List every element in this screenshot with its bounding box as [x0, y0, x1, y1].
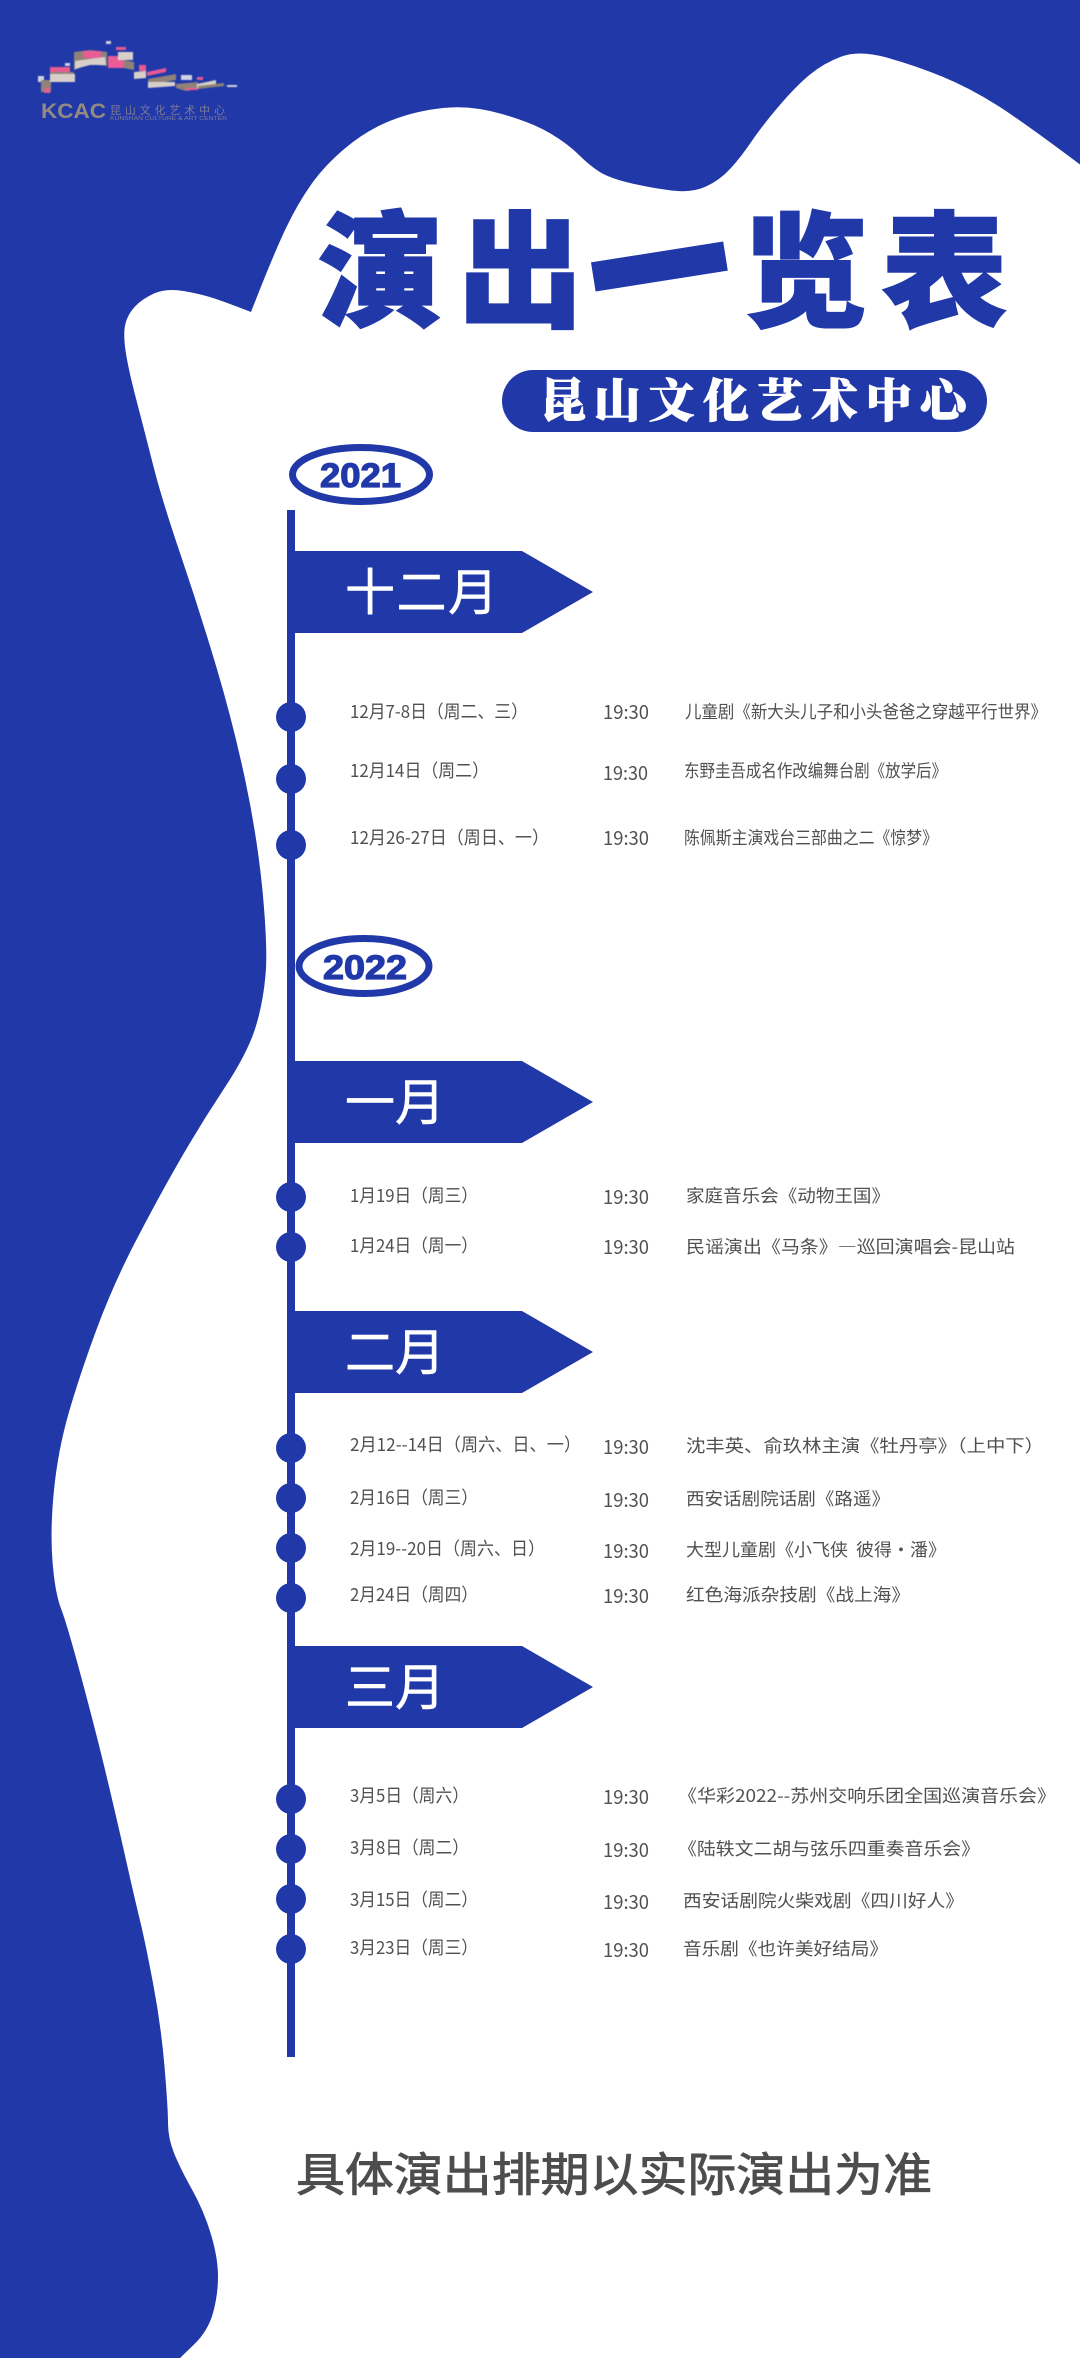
logo: KCAC: [38, 41, 237, 123]
schedule rows: March: 3月5日（周六）: [350, 1782, 469, 1808]
year badge 2021: 2021: [320, 457, 401, 495]
schedule rows: February: 2月19--20日（周六、日）: [350, 1535, 545, 1561]
schedule rows: December: 19:30: [603, 698, 649, 725]
schedule rows: March: 3月15日（周二）: [350, 1886, 478, 1912]
schedule rows: February: 沈丰英、俞玖林主演《牡丹亭》（上中下）: [686, 1433, 1044, 1458]
schedule rows: March: 3月23日（周三）: [350, 1934, 478, 1960]
month banner: March: 三月: [345, 1648, 445, 1720]
month banner: February: [287, 1311, 593, 1393]
logo Chinese name: 昆山文化艺术中心: [110, 102, 225, 118]
schedule rows: December: [350, 698, 1047, 851]
year badge 2022: [299, 938, 429, 994]
title: [318, 153, 1007, 368]
logo wordmark: KCAC: [41, 100, 106, 123]
schedule rows: March: 《华彩2022--苏州交响乐团全国巡演音乐会》: [678, 1783, 1056, 1808]
month banner: December: [287, 551, 593, 633]
schedule rows: March: [350, 1782, 1056, 1963]
title: 演出: [318, 172, 583, 353]
schedule rows: February: 19:30: [603, 1537, 649, 1564]
year badge 2022: 2022: [323, 949, 407, 987]
footer note: 具体演出排期以实际演出为准: [296, 2139, 932, 2205]
title: 一: [576, 153, 740, 368]
schedule rows: February: 19:30: [603, 1582, 649, 1609]
schedule rows: March: 19:30: [603, 1888, 649, 1915]
schedule rows: December: 12月14日（周二）: [350, 757, 489, 783]
schedule rows: February: 2月24日（周四）: [350, 1581, 478, 1607]
schedule rows: December: 陈佩斯主演戏台三部曲之二《惊梦》: [684, 825, 938, 850]
schedule rows: February: 2月16日（周三）: [350, 1484, 478, 1510]
schedule rows: February: [350, 1431, 1044, 1609]
schedule rows: January: 1月19日（周三）: [350, 1182, 478, 1208]
schedule rows: March: 西安话剧院火柴戏剧《四川好人》: [683, 1888, 964, 1913]
schedule rows: March: 音乐剧《也许美好结局》: [683, 1936, 888, 1961]
schedule rows: March: 19:30: [603, 1783, 649, 1810]
month banner: February: 二月: [345, 1313, 445, 1385]
schedule rows: February: 大型儿童剧《小飞侠 彼得•潘》: [686, 1537, 946, 1562]
schedule rows: January: 19:30: [603, 1233, 649, 1260]
month banner: December: 十二月: [345, 553, 498, 625]
schedule rows: December: 儿童剧《新大头儿子和小头爸爸之穿越平行世界》: [685, 699, 1047, 724]
month banner: January: [287, 1061, 593, 1143]
schedule rows: January: [350, 1182, 1015, 1260]
schedule rows: February: 19:30: [603, 1433, 649, 1460]
schedule rows: March: 3月8日（周二）: [350, 1834, 469, 1860]
timeline axis: [287, 510, 295, 2057]
schedule rows: March: 《陆轶文二胡与弦乐四重奏音乐会》: [678, 1836, 980, 1861]
schedule rows: February: 红色海派杂技剧《战上海》: [686, 1582, 910, 1607]
schedule rows: December: 12月7-8日（周二、三）: [350, 698, 528, 724]
schedule rows: February: 2月12--14日（周六、日、一）: [350, 1431, 581, 1457]
subtitle pill: 昆山文化艺术中心: [540, 365, 974, 431]
schedule rows: February: 西安话剧院话剧《路遥》: [686, 1486, 890, 1511]
year badge 2021: [292, 448, 430, 502]
logo mark: ribbon arch: [38, 41, 237, 93]
schedule rows: December: 19:30: [603, 824, 649, 851]
schedule rows: February: 19:30: [603, 1486, 649, 1513]
schedule rows: December: 东野圭吾成名作改编舞台剧《放学后》: [684, 758, 947, 783]
schedule rows: March: 19:30: [603, 1936, 649, 1963]
schedule rows: December: 12月26-27日（周日、一）: [350, 824, 549, 850]
month banner: March: [287, 1646, 593, 1728]
title: 览表: [743, 172, 1007, 353]
schedule rows: December: 19:30: [603, 759, 648, 786]
timeline dots: [276, 702, 306, 1964]
month banner: January: 一月: [345, 1063, 445, 1135]
logo English name: KUNSHAN CULTURE & ART CENTER: [110, 116, 228, 122]
schedule rows: January: 1月24日（周一）: [350, 1232, 478, 1258]
schedule rows: January: 家庭音乐会《动物王国》: [686, 1183, 890, 1208]
schedule rows: January: 19:30: [603, 1183, 649, 1210]
schedule rows: January: 民谣演出《马条》—巡回演唱会-昆山站: [686, 1234, 1015, 1259]
schedule rows: March: 19:30: [603, 1836, 649, 1863]
